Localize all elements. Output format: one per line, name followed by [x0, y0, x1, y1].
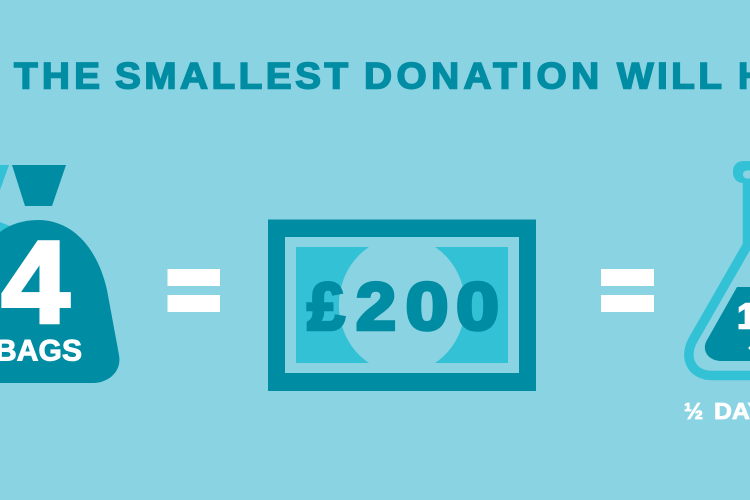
- icon: money bag with 4 bags: 4: [2, 218, 69, 348]
- title: WILL: [617, 56, 722, 97]
- banknote: £200: [268, 220, 536, 391]
- flask label: ½: [684, 398, 703, 424]
- title: DONATION: [364, 56, 599, 97]
- title: THE: [14, 56, 100, 97]
- icon: flask: [689, 161, 750, 376]
- banknote: £200: £: [307, 270, 345, 344]
- equals sign right: [601, 269, 654, 312]
- title: [14, 55, 750, 97]
- flask label: [684, 398, 750, 425]
- banknote: £200: 0: [406, 270, 448, 344]
- icon: money bag with 4 bags: [0, 165, 119, 383]
- banknote: £200: 2: [356, 269, 396, 344]
- title: SMALLEST: [115, 56, 348, 97]
- banknote: £200: 0: [456, 270, 499, 344]
- equals sign left: [168, 269, 220, 312]
